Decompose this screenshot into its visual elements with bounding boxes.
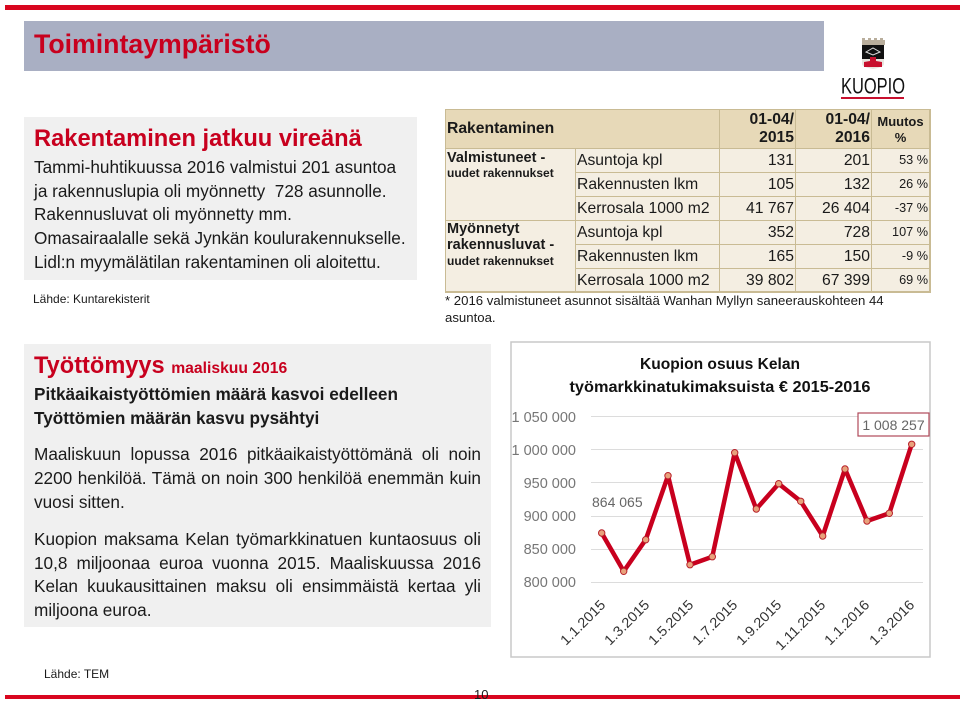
table rows: Kerrosala 1000 m2	[577, 200, 710, 217]
table footnote: * 2016 valmistuneet asunnot sisältää Wanhan Myllyn saneerauskohteen 44	[445, 293, 884, 308]
x axis labels: 1.1.2016	[821, 596, 873, 648]
table footnote	[445, 293, 884, 324]
table rows: Rakennusten lkm	[577, 248, 698, 265]
x axis labels: 1.5.2015	[645, 596, 697, 648]
x axis labels: 1.11.2015	[772, 596, 829, 653]
unemployment paragraph 2	[34, 529, 481, 620]
row group: permits: Myönnetyt	[447, 221, 520, 237]
table rows: 131	[768, 152, 794, 169]
construction text: Lidl:n myymälätilan rakentaminen oli aloitettu.	[34, 252, 381, 272]
construction text: Omasairaalalle sekä Jynkän koulurakennukselle.	[34, 228, 406, 248]
data line	[602, 444, 912, 571]
table header	[446, 110, 930, 149]
y axis labels: 800 000	[524, 575, 576, 591]
y axis labels	[511, 410, 576, 591]
table rows: 201	[844, 152, 870, 169]
top red rule	[5, 5, 960, 10]
unemployment subheadings: Pitkäaikaistyöttömien määrä kasvoi edelleen	[34, 384, 398, 404]
construction text: Tammi-huhtikuussa 2016 valmistui 201 asuntoa	[34, 157, 396, 177]
data label: last value	[858, 413, 929, 436]
y axis labels: 1 000 000	[511, 443, 576, 459]
x axis labels: 1.3.2016	[866, 596, 918, 648]
y axis labels: 1 050 000	[511, 410, 576, 426]
table rows: 41 767	[746, 200, 794, 217]
row group: permits	[446, 221, 576, 292]
table rows: 165	[768, 248, 794, 265]
data label: last value: 1 008 257	[862, 417, 925, 433]
table rows: 728	[844, 224, 870, 241]
table rows	[576, 149, 930, 292]
unemployment paragraph 2: Kuopion maksama Kelan työmarkkinatuen kuntaosuus oli	[34, 529, 481, 549]
chart title: Kuopion osuus Kelan	[640, 356, 800, 373]
unemployment paragraph 1	[34, 444, 481, 512]
unemployment subheadings: Työttömien määrän kasvu pysähtyi	[34, 408, 319, 428]
table header: 2015	[759, 129, 794, 146]
chart: Kela payments	[510, 341, 931, 658]
row group: completed: uudet rakennukset	[447, 166, 554, 180]
table rows: 132	[844, 176, 870, 193]
table header: Rakentaminen	[447, 120, 554, 137]
bottom red rule	[5, 695, 960, 699]
table rows: -9 %	[902, 249, 928, 263]
title: Toimintaympäristö	[34, 29, 271, 59]
table rows: 26 %	[899, 177, 928, 191]
x axis labels: 1.9.2015	[733, 596, 785, 648]
data label: first value: 864 065	[592, 494, 643, 510]
table rows: Asuntoja kpl	[577, 152, 662, 169]
row group: permits: uudet rakennukset	[447, 254, 554, 268]
y axis labels: 850 000	[524, 542, 576, 558]
table rows: 69 %	[899, 273, 928, 287]
panel: unemployment	[24, 344, 491, 627]
unemployment paragraph 2: 10,8 miljoonaa euroa vuonna 2015. Maaliskuussa 2016	[34, 553, 481, 573]
table rows: 107 %	[892, 225, 928, 239]
x axis labels: 1.3.2015	[601, 596, 653, 648]
row group: completed	[446, 149, 576, 221]
table header: 01-04/	[826, 111, 870, 128]
row group: completed: Valmistuneet -	[447, 150, 545, 166]
table: construction statistics	[445, 109, 931, 293]
unemployment paragraph 2: miljoona euroa.	[34, 600, 152, 620]
logo: Kuopio	[841, 38, 905, 99]
table rows: 105	[768, 176, 794, 193]
table rows: Asuntoja kpl	[577, 224, 662, 241]
chart title: työmarkkinatukimaksuista € 2015-2016	[570, 379, 871, 396]
panel heading: construction: Rakentaminen jatkuu vireänä	[34, 126, 362, 152]
table header: Muutos	[877, 114, 924, 129]
table rows: -37 %	[895, 201, 928, 215]
source: TEM: Lähde: TEM	[44, 667, 109, 681]
panel heading: unemployment: Työttömyys maaliskuu 2016	[34, 353, 287, 379]
table header: 2016	[835, 129, 870, 146]
table rows: 67 399	[822, 272, 870, 289]
source: construction: Lähde: Kuntarekisterit	[33, 292, 150, 306]
table footnote: asuntoa.	[445, 310, 496, 324]
data markers	[598, 441, 915, 574]
construction text: ja rakennuslupia oli myönnetty 728 asunnolle.	[34, 181, 387, 201]
table rows: 150	[844, 248, 870, 265]
construction text	[34, 157, 406, 272]
table header: 01-04/	[750, 111, 794, 128]
table rows: Kerrosala 1000 m2	[577, 272, 710, 289]
title bar	[24, 21, 824, 71]
chart title	[570, 356, 871, 396]
unemployment paragraph 1: Maaliskuun lopussa 2016 pitkäaikaistyöttömänä oli noin	[34, 444, 481, 464]
construction text: Rakennusluvat oli myönnetty mm.	[34, 204, 292, 224]
row group: permits: rakennusluvat -	[447, 237, 554, 253]
unemployment subheadings	[34, 384, 398, 428]
unemployment paragraph 1: 2200 henkilöä. Tämä on noin 300 henkilöä enemmän kuin	[34, 468, 481, 488]
table rows: 39 802	[746, 272, 794, 289]
table rows: 26 404	[822, 200, 870, 217]
table header: %	[895, 130, 906, 145]
x axis labels: 1.7.2015	[689, 596, 741, 648]
table rows: 53 %	[899, 153, 928, 167]
unemployment paragraph 2: Kelan kuukausittainen maksu oli ensimmäistä kertaa yli	[34, 576, 481, 596]
x axis labels: 1.1.2015	[557, 596, 609, 648]
table rows: 352	[768, 224, 794, 241]
unemployment paragraph 1: vuosi sitten.	[34, 492, 125, 512]
x axis labels	[557, 596, 918, 653]
table rows: Rakennusten lkm	[577, 176, 698, 193]
panel: construction	[24, 117, 417, 280]
y axis labels: 950 000	[524, 476, 576, 492]
y axis labels: 900 000	[524, 509, 576, 525]
